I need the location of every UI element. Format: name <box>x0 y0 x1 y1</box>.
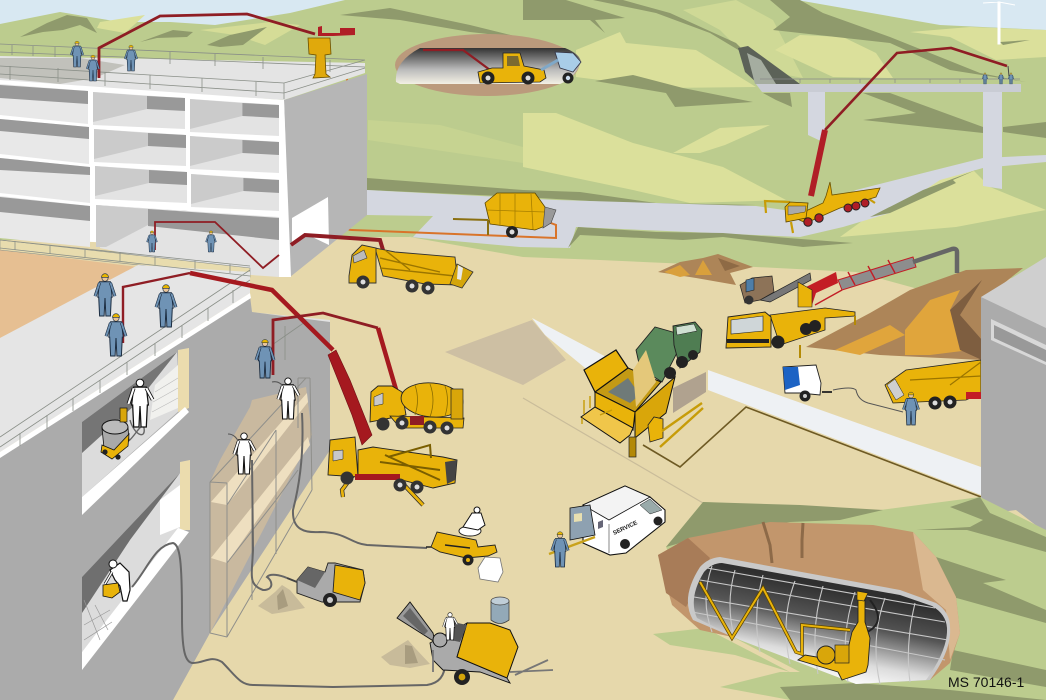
mixer truck with boom <box>273 313 464 434</box>
red boom and terrace pipe <box>123 273 333 350</box>
concrete boom terrace workers <box>95 274 274 378</box>
mortar mixer machines in windows <box>101 408 129 598</box>
scaffolding <box>210 378 312 637</box>
ground <box>0 237 1046 700</box>
roof <box>0 56 365 100</box>
mobile batching hopper <box>581 350 703 457</box>
water barrel <box>491 597 509 624</box>
tunnel mixer bucket <box>541 52 581 84</box>
wind turbine <box>983 2 1015 44</box>
drawing reference code: MS 70146-1 <box>948 674 1024 690</box>
cement sack <box>478 557 503 582</box>
building upper left <box>0 44 367 277</box>
aggregate loader <box>740 276 774 304</box>
roof railings <box>0 44 365 99</box>
service van <box>570 486 665 555</box>
lower terrace sand area <box>0 250 138 338</box>
road <box>350 155 1046 248</box>
green tipper truck <box>636 322 702 382</box>
indoor boom and workers <box>147 222 279 268</box>
main face <box>0 296 330 700</box>
plaster wall <box>210 387 312 633</box>
hoses <box>127 382 445 687</box>
lower window <box>82 460 190 670</box>
centre bays <box>93 92 188 242</box>
bridge workers <box>982 73 1014 84</box>
orange delivery line <box>326 75 556 238</box>
right building <box>981 257 1046 533</box>
compressor trailer <box>783 365 832 402</box>
van service lettering: SERVICE <box>612 520 639 537</box>
lower left building <box>0 240 330 700</box>
large trailer pump <box>397 602 553 685</box>
tunnel lining <box>688 557 950 684</box>
stationary boom on column <box>99 14 355 78</box>
bridge <box>738 46 1021 189</box>
tunnel loader <box>478 53 546 84</box>
concrete wall pad and white wall <box>445 318 981 503</box>
small mortar pump with operator <box>426 507 497 566</box>
left bays <box>0 84 90 247</box>
truck mounted pump front <box>328 350 457 505</box>
bridge pump truck with boom <box>765 48 1009 233</box>
tunnel spray pipe <box>700 582 850 654</box>
facade <box>0 80 290 277</box>
concrete pump truck centre top <box>291 235 473 294</box>
tunnel portal on hillside <box>395 34 581 96</box>
tunnel grid <box>692 566 948 684</box>
worker with pipe <box>549 532 595 567</box>
bottom right excavation <box>653 497 1046 700</box>
right bays <box>190 99 280 211</box>
small dirt pile <box>658 254 753 285</box>
plaster pump grey and yellow <box>287 563 365 607</box>
spray workers in white <box>105 378 299 601</box>
sand pile near scaffold <box>258 585 305 614</box>
tunnel pump machine <box>798 591 878 680</box>
big dirt pile <box>806 268 1023 360</box>
terrace <box>0 265 250 452</box>
right face <box>284 74 367 277</box>
sky <box>0 0 1046 300</box>
terrace railings <box>0 240 305 447</box>
hose to worker right <box>833 388 903 412</box>
belt placer truck <box>726 249 957 358</box>
trailer pump on road <box>453 193 556 238</box>
sand pile near large pump <box>381 640 430 668</box>
upper window <box>82 348 189 515</box>
hills background <box>0 0 1046 290</box>
truck at right <box>885 360 982 410</box>
roof workers <box>71 41 137 81</box>
worker at truck <box>903 392 919 425</box>
